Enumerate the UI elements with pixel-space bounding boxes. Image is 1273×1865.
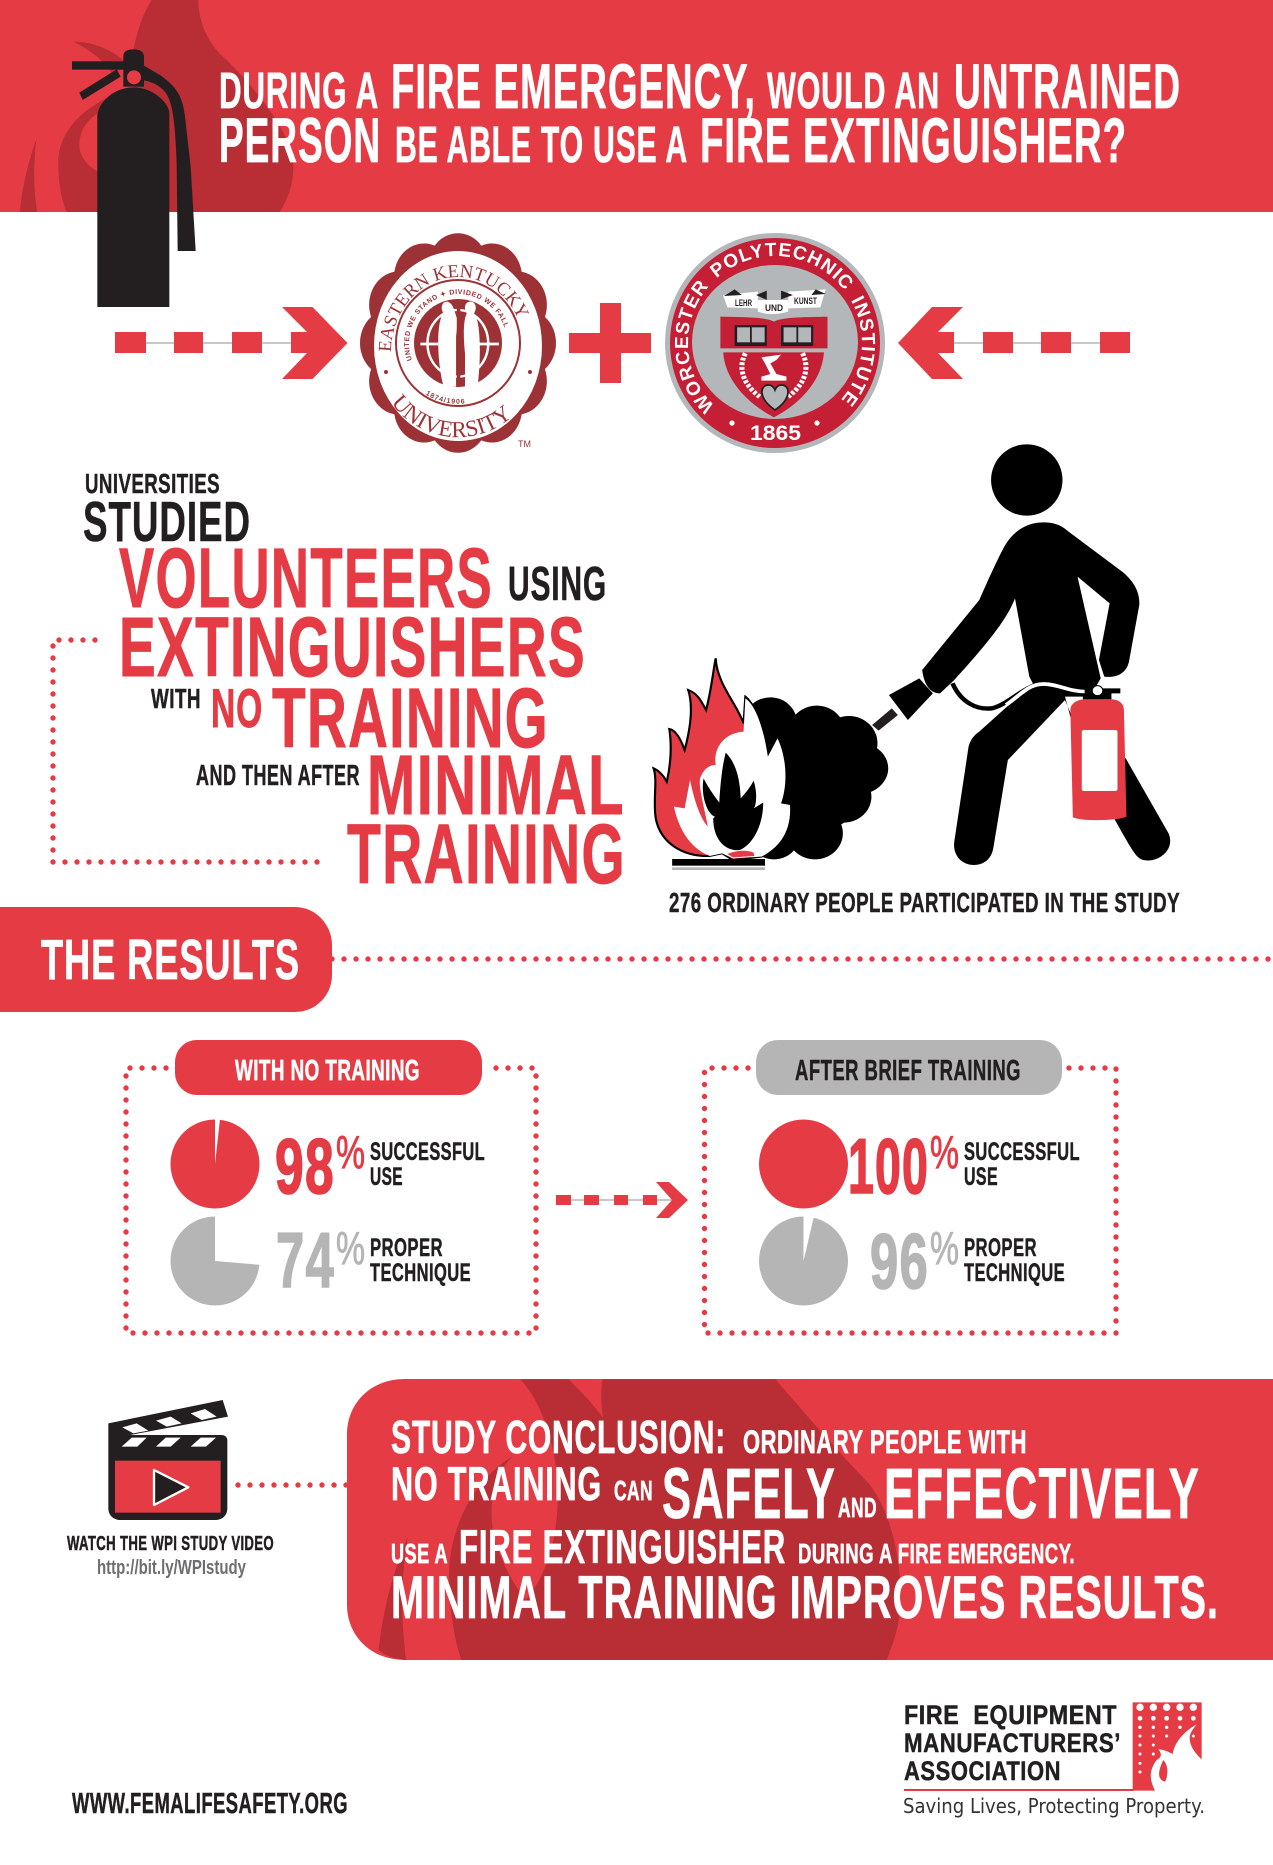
text block: study description: TRAINING: [272, 671, 549, 765]
stat: 98 percent successful use: %: [336, 1126, 365, 1178]
text: video link: http://bit.ly/WPIstudy: [97, 1557, 247, 1579]
dotted connector: study text bracket: [53, 640, 321, 862]
title: [219, 52, 1181, 176]
conclusion text: ORDINARY PEOPLE WITH: [743, 1424, 1027, 1460]
seal lettering: UNIVERSITY: [394, 393, 510, 438]
title: FIRE EMERGENCY,: [391, 52, 756, 122]
nozzle: [889, 678, 933, 720]
stat: 98 percent successful use: [275, 1122, 485, 1210]
icon: black fire extinguisher: [72, 49, 196, 307]
pie chart: 100 percent: [759, 1120, 848, 1208]
title: WOULD AN: [767, 62, 940, 119]
conclusion text: AND: [838, 1492, 877, 1523]
text block: study description: NO: [211, 677, 263, 739]
text: website: WWW.FEMALIFESAFETY.ORG: [72, 1788, 348, 1820]
text block: study description: VOLUNTEERS: [119, 531, 493, 625]
arrow: no training to after training: [556, 1182, 688, 1218]
conclusion text: USE A: [391, 1538, 448, 1569]
arrow: right dashed arrow to universities: [898, 307, 1130, 379]
text block: study description: EXTINGUISHERS: [119, 600, 586, 694]
tagline: Saving Lives, Protecting Property.: [903, 1794, 1205, 1818]
stat: 74 percent proper technique: TECHNIQUE: [370, 1259, 471, 1287]
title: BE ABLE TO USE A: [395, 116, 688, 173]
logo: Worcester Polytechnic Institute seal: [665, 233, 885, 453]
seal lettering: EASTERN KENTUCKY: [378, 264, 530, 352]
flame shapes behind extinguisher: [20, 0, 293, 212]
burner base: [672, 859, 765, 866]
hose: [952, 683, 1044, 709]
icon: plus sign: [569, 303, 651, 383]
shield and crest: [720, 289, 827, 417]
stat: 96 percent proper technique: [870, 1217, 1065, 1305]
icon: video clapperboard: [108, 1400, 228, 1520]
stat: 100 percent successful use: %: [930, 1126, 959, 1178]
conclusion text: DURING A FIRE EMERGENCY.: [798, 1538, 1075, 1569]
heading: the results: THE RESULTS: [41, 928, 300, 992]
logo: Worcester Polytechnic Institute seal: UND: [765, 303, 783, 313]
two men and wheel: [420, 302, 499, 387]
person head: [991, 444, 1062, 516]
stat: 74 percent proper technique: [276, 1216, 471, 1304]
conclusion text: [391, 1411, 1219, 1631]
flame shapes: [379, 1379, 901, 1660]
stat: 74 percent proper technique: %: [336, 1222, 365, 1274]
text block: study description: TRAINING: [347, 807, 626, 901]
logo: Eastern Kentucky University seal: [360, 233, 556, 453]
dotted line: results divider: [332, 956, 1273, 962]
text: video link: [67, 1533, 274, 1579]
seal lettering: UNITED WE STAND ✦ DIVIDED WE FALL: [404, 289, 508, 362]
heading: the results: [0, 907, 332, 1012]
pie chart: 96 percent: [759, 1216, 848, 1306]
stat: 96 percent proper technique: 96: [870, 1217, 929, 1305]
text block: study description: WITH: [151, 683, 201, 714]
logo: Fire Equipment Manufacturers' Association: ASSOCIATION: [904, 1756, 1061, 1786]
panel: study conclusion: [347, 1379, 1273, 1660]
stat: 74 percent proper technique: PROPER: [370, 1234, 443, 1262]
stat: 98 percent successful use: 98: [275, 1122, 335, 1210]
stat: 96 percent proper technique: TECHNIQUE: [964, 1259, 1065, 1287]
header band: [0, 0, 1273, 212]
dotted connector: video to conclusion: [238, 1482, 347, 1488]
pie chart: 98 percent: [170, 1119, 260, 1208]
logo: Worcester Polytechnic Institute seal: 1865: [750, 422, 801, 445]
trademark: TM: [518, 439, 531, 449]
pill heading: WITH NO TRAINING: [235, 1055, 420, 1087]
arrow: left dashed arrow to universities: [115, 307, 348, 379]
flame: [654, 658, 790, 860]
pill heading: [756, 1040, 1062, 1095]
logo: Fire Equipment Manufacturers' Association: [903, 1700, 1205, 1818]
stat: 96 percent proper technique: %: [930, 1222, 959, 1274]
person body: [922, 522, 1170, 865]
stat: 98 percent successful use: USE: [370, 1163, 403, 1191]
pie chart: 74 percent: [170, 1215, 262, 1306]
conclusion text: SAFELY: [662, 1455, 836, 1534]
seal lettering: 1874/1906: [426, 391, 464, 404]
conclusion text: STUDY CONCLUSION:: [391, 1411, 726, 1463]
pill heading: AFTER BRIEF TRAINING: [795, 1055, 1021, 1087]
text block: study description: USING: [508, 558, 607, 611]
panel: after brief training: [704, 1040, 1116, 1333]
illustration: person using extinguisher on fire: [654, 444, 1170, 870]
conclusion text: FIRE EXTINGUISHER: [459, 1520, 786, 1573]
text block: study description: UNIVERSITIES: [85, 468, 220, 499]
text block: study description: MINIMAL: [367, 738, 625, 832]
title: PERSON: [219, 106, 381, 176]
seal lettering: [378, 264, 532, 438]
pill heading: [175, 1040, 482, 1095]
stat: 98 percent successful use: SUCCESSFUL: [370, 1138, 485, 1166]
conclusion text: NO TRAINING: [391, 1457, 602, 1510]
conclusion text: CAN: [614, 1475, 653, 1506]
logo: Fire Equipment Manufacturers' Association: FIRE EQUIPMENT: [904, 1700, 1117, 1730]
red extinguisher: [1083, 688, 1120, 699]
logo: Worcester Polytechnic Institute seal: KUNST: [794, 296, 817, 306]
stat: 100 percent successful use: USE: [964, 1163, 998, 1191]
logo: Worcester Polytechnic Institute seal: LEHR: [735, 298, 752, 308]
stat: 100 percent successful use: 100: [848, 1122, 929, 1210]
title: DURING A: [219, 62, 379, 119]
logo: Fire Equipment Manufacturers' Association: MANUFACTURERS’: [904, 1728, 1121, 1758]
stat: 74 percent proper technique: 74: [276, 1216, 335, 1304]
stat: 100 percent successful use: [848, 1122, 1080, 1210]
panel: with no training: [126, 1040, 536, 1333]
logo mark: [1133, 1702, 1202, 1791]
ring lettering: WORCESTER POLYTECHNIC INSTITUTE: [674, 242, 876, 415]
stat: 96 percent proper technique: PROPER: [964, 1234, 1037, 1262]
text block: study description: STUDIED: [83, 490, 251, 554]
text block: study description: [83, 468, 626, 901]
stat: 100 percent successful use: SUCCESSFUL: [964, 1138, 1080, 1166]
text: video link: WATCH THE WPI STUDY VIDEO: [67, 1533, 274, 1555]
smoke cloud: [744, 697, 888, 859]
text block: study description: AND THEN AFTER: [196, 760, 360, 792]
